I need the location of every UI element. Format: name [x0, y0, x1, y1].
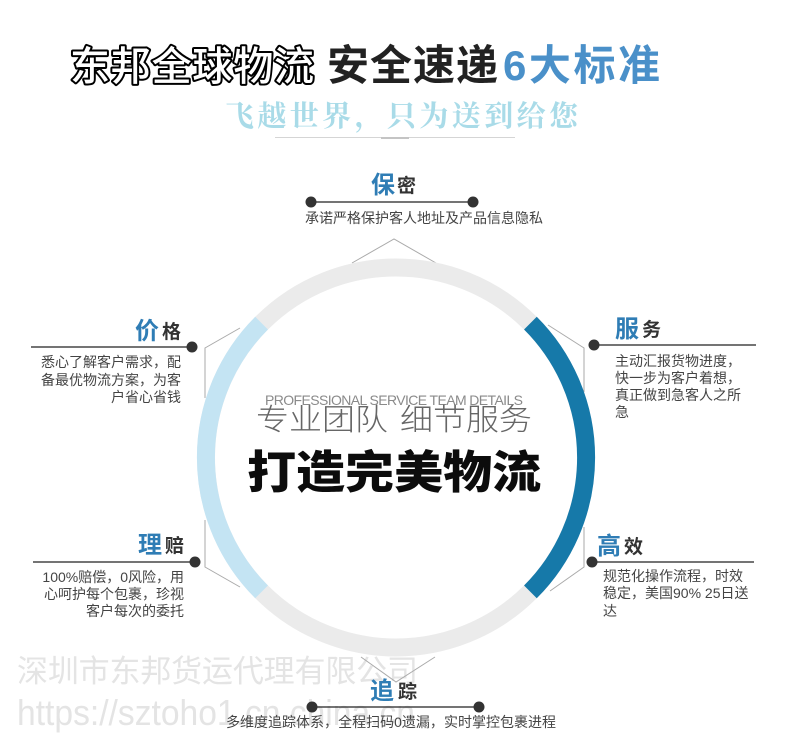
watermark: company name and url: https://sztoho1.cn.china.cn — [17, 692, 415, 733]
ring segment: light blue left — [206, 323, 262, 592]
section: 价格 — [31, 318, 198, 405]
title: 东邦全球物流 — [70, 45, 314, 89]
section: 价格: 户省心省钱 — [111, 389, 181, 405]
section: 追踪: 追 — [370, 678, 394, 705]
subtitle: 飞越世界，只为送到给您 — [225, 100, 580, 133]
section: 服务: 主动汇报货物进度， — [615, 353, 741, 369]
section: 高效: 达 — [603, 603, 617, 619]
ring segment: dark blue right — [530, 323, 586, 592]
section: 保密: 密 — [397, 174, 416, 197]
section: 保密 — [305, 172, 543, 226]
section: 高效 — [586, 533, 754, 619]
section: 服务: 服 — [615, 316, 639, 343]
hexagon outline — [205, 239, 584, 682]
center text: 细节服务 — [400, 402, 532, 437]
section: 理赔: 理 — [138, 532, 162, 559]
section: 保密: 保 — [371, 172, 395, 199]
section: 追踪 — [226, 678, 556, 730]
section: 高效: 稳定，美国90% 25日送 — [603, 585, 748, 601]
watermark: company name and url — [17, 654, 418, 733]
section: 服务: 务 — [642, 319, 661, 341]
section: 高效: 高 — [597, 533, 621, 560]
section: 理赔: 100%赔偿，0风险，用 — [42, 569, 184, 585]
section: 保密: 承诺严格保护客人地址及产品信息隐私 — [305, 210, 543, 226]
center text: 专业团队 — [256, 402, 388, 437]
section: 理赔: 赔 — [165, 535, 184, 557]
section: 理赔 — [33, 532, 200, 619]
section: 价格: 悉心了解客户需求，配 — [41, 354, 181, 370]
subtitle underline — [275, 137, 515, 139]
section: 价格: 备最优物流方案，为客 — [41, 372, 181, 388]
section: 追踪: 多维度追踪体系，全程扫码0遗漏，实时掌控包裹进程 — [226, 714, 556, 730]
title — [70, 42, 660, 89]
section: 理赔: 心呵护每个包裹，珍视 — [44, 586, 184, 602]
section: 理赔: 客户每次的委托 — [86, 603, 184, 619]
section: 价格: 价 — [135, 318, 159, 345]
title: 6大标准 — [503, 42, 660, 89]
center text: 打造完美物流 — [247, 447, 541, 498]
ring chart — [206, 268, 586, 648]
section: 追踪: 踪 — [398, 680, 417, 703]
section: 服务: 快一步为客户着想， — [615, 370, 741, 386]
center text: PROFESSIONAL SERVICE TEAM DETAILS — [265, 392, 523, 408]
section: 价格: 格 — [162, 321, 181, 343]
section: 服务: 急 — [615, 404, 629, 420]
center text — [247, 392, 541, 498]
section: 高效: 效 — [624, 536, 643, 558]
section: 服务: 真正做到急客人之所 — [615, 387, 741, 403]
section: 高效: 规范化操作流程，时效 — [603, 568, 743, 584]
section: 服务 — [588, 316, 756, 420]
watermark: company name and url: 深圳市东邦货运代理有限公司 — [17, 654, 418, 689]
title: 安全速递 — [327, 42, 498, 89]
